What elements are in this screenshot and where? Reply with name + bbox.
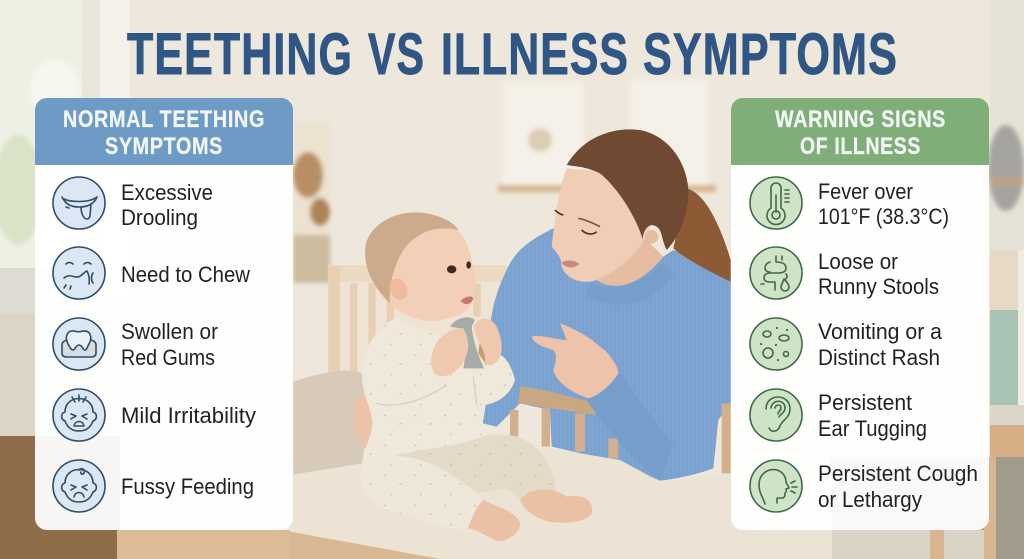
- baby hair: [365, 212, 458, 303]
- baby eyes and mouth: [447, 261, 473, 304]
- text: loose stools: [818, 249, 939, 299]
- mother supporting hand: [354, 395, 380, 449]
- baby pants: [390, 434, 557, 502]
- baby top: [362, 317, 515, 458]
- title: [127, 22, 898, 87]
- text: cough lethargy: [818, 461, 978, 512]
- sweater collar: [585, 263, 673, 305]
- title: VS: [368, 22, 425, 87]
- icon: thermometer: [750, 177, 802, 229]
- pillow: [293, 371, 365, 475]
- text: loose stools: Runny Stools: [818, 274, 939, 299]
- baby ear: [390, 279, 407, 300]
- text: cough lethargy: or Lethargy: [818, 487, 923, 512]
- icon: rash: [750, 318, 802, 370]
- panel header: normal teething: [35, 98, 293, 165]
- title: ILLNESS: [441, 22, 629, 87]
- text: cough lethargy: Persistent Cough: [818, 461, 978, 486]
- text: vomiting rash: Vomiting or a: [818, 319, 942, 344]
- mother hair: [567, 129, 688, 250]
- mother ponytail: [673, 188, 731, 282]
- text: swollen or red gums: [121, 319, 218, 370]
- panel: warning signs of illness: [731, 98, 989, 530]
- icon: drooling mouth: [53, 177, 105, 229]
- crib rail front: [510, 387, 731, 473]
- baby hands: [431, 328, 468, 376]
- panel header: warning signs: [731, 98, 989, 165]
- text: fussy feeding: Fussy Feeding: [121, 474, 254, 499]
- panel header: normal teething: SYMPTOMS: [105, 133, 223, 160]
- mother pointing hand: [532, 323, 618, 398]
- text: vomiting rash: Distinct Rash: [818, 345, 940, 370]
- panel header: normal teething: NORMAL TEETHING: [63, 106, 265, 133]
- text: swollen or red gums: Swollen or: [121, 319, 218, 344]
- title: TEETHING: [127, 22, 353, 87]
- text: loose stools: Loose or: [818, 249, 898, 274]
- teether toy: [450, 317, 484, 368]
- text: ear tugging: [818, 390, 927, 441]
- icon: fussy baby: [53, 460, 105, 512]
- illustration: mother and baby: [290, 129, 740, 559]
- mother eyes and mouth: [555, 210, 658, 268]
- baby feet: [520, 490, 592, 523]
- icon: intestines: [750, 247, 802, 299]
- text: fever: Fever over: [818, 179, 913, 204]
- text: excessive drooling: [121, 180, 213, 230]
- icon: irritable baby: [53, 389, 105, 441]
- text: excessive drooling: Drooling: [121, 205, 198, 230]
- text: ear tugging: Ear Tugging: [818, 416, 927, 441]
- mother face and neck: [597, 237, 663, 286]
- icon: ear: [750, 389, 802, 441]
- panel: normal teething symptoms: [35, 98, 293, 530]
- panel header: warning signs: WARNING SIGNS: [775, 106, 946, 133]
- text: need to chew: Need to Chew: [121, 262, 251, 287]
- text: fever: [818, 179, 949, 229]
- text: excessive drooling: Excessive: [121, 180, 213, 205]
- mother sleeve: [587, 370, 673, 481]
- icon: swollen gums: [53, 318, 105, 370]
- baby front leg: [361, 455, 484, 531]
- blanket: [290, 448, 740, 559]
- title: SYMPTOMS: [643, 22, 898, 87]
- text: swollen or red gums: Red Gums: [121, 345, 215, 370]
- blanket extension under right panel: [740, 475, 832, 559]
- icon: cough: [750, 460, 802, 512]
- panel header: warning signs: OF ILLNESS: [800, 133, 921, 160]
- text: fever: 101°F (38.3°C): [818, 204, 949, 229]
- text: mild irritability: Mild Irritability: [121, 403, 257, 428]
- baby head: [366, 212, 476, 321]
- crib back: [328, 265, 507, 373]
- text: ear tugging: Persistent: [818, 390, 913, 415]
- icon: need to chew: [53, 247, 105, 299]
- text: vomiting rash: [818, 319, 942, 370]
- mother sweater: [483, 227, 731, 481]
